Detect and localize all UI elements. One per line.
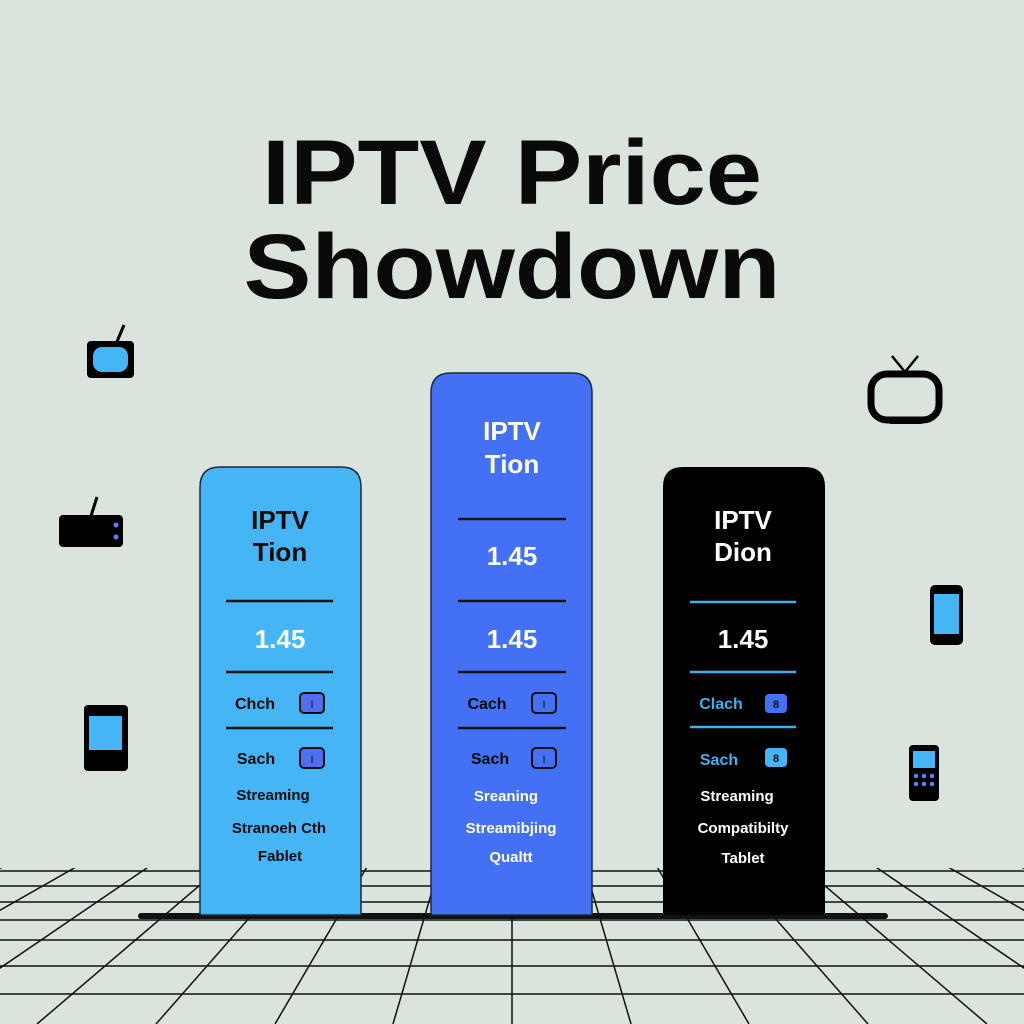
card: right black: Compatibilty [698, 820, 789, 837]
card: left light blue: Fablet [258, 848, 302, 865]
card: middle blue: 1.45 [487, 624, 537, 654]
card: middle blue: 1.45 [487, 541, 537, 571]
card: middle blue: Sach [471, 751, 509, 768]
card: middle blue [431, 373, 592, 915]
card: right black: 8 [773, 699, 779, 711]
card: right black: Dion [714, 537, 772, 567]
card: middle blue: Streamibjing [466, 820, 556, 837]
icon: outline tv right [871, 356, 939, 424]
icon: tablet left [84, 705, 128, 771]
card: right black [663, 467, 825, 915]
card: middle blue: I [542, 699, 546, 711]
card: left light blue [200, 467, 361, 915]
card: left light blue: IPTV [251, 505, 310, 535]
card: middle blue: I [542, 754, 546, 766]
card: right black: 1.45 [718, 624, 768, 654]
icon: feature phone [909, 745, 939, 801]
card: right black: Clach [699, 696, 743, 713]
card: right black: Sach [700, 752, 738, 769]
card: left light blue: Sach [237, 751, 275, 768]
title [244, 122, 780, 318]
card: middle blue: IPTV [483, 416, 542, 446]
card: left light blue: I [310, 699, 314, 711]
card: middle blue: Sreaning [474, 788, 538, 805]
card: right black: Streaming [700, 788, 774, 805]
card: left light blue: Streaming [236, 787, 310, 804]
card: middle blue: Qualtt [489, 849, 533, 866]
card: left light blue: Tion [253, 537, 307, 567]
card: left light blue: Chch [235, 696, 275, 713]
base bar [138, 913, 888, 919]
card: left light blue: 1.45 [255, 624, 305, 654]
card: right black: IPTV [714, 505, 773, 535]
card: middle blue: Tion [485, 449, 539, 479]
icon: smartphone [930, 585, 963, 645]
title: IPTV Price [262, 122, 762, 224]
card: middle blue: Cach [467, 696, 507, 713]
card: right black: Tablet [721, 850, 765, 867]
floor grid [0, 868, 1024, 1024]
icon: router [59, 497, 123, 547]
title: Showdown [244, 216, 780, 318]
card: left light blue: I [310, 754, 314, 766]
card: left light blue: Stranoeh Cth [232, 820, 326, 837]
icon: retro tv left [87, 325, 134, 378]
card: right black: 8 [773, 753, 779, 765]
